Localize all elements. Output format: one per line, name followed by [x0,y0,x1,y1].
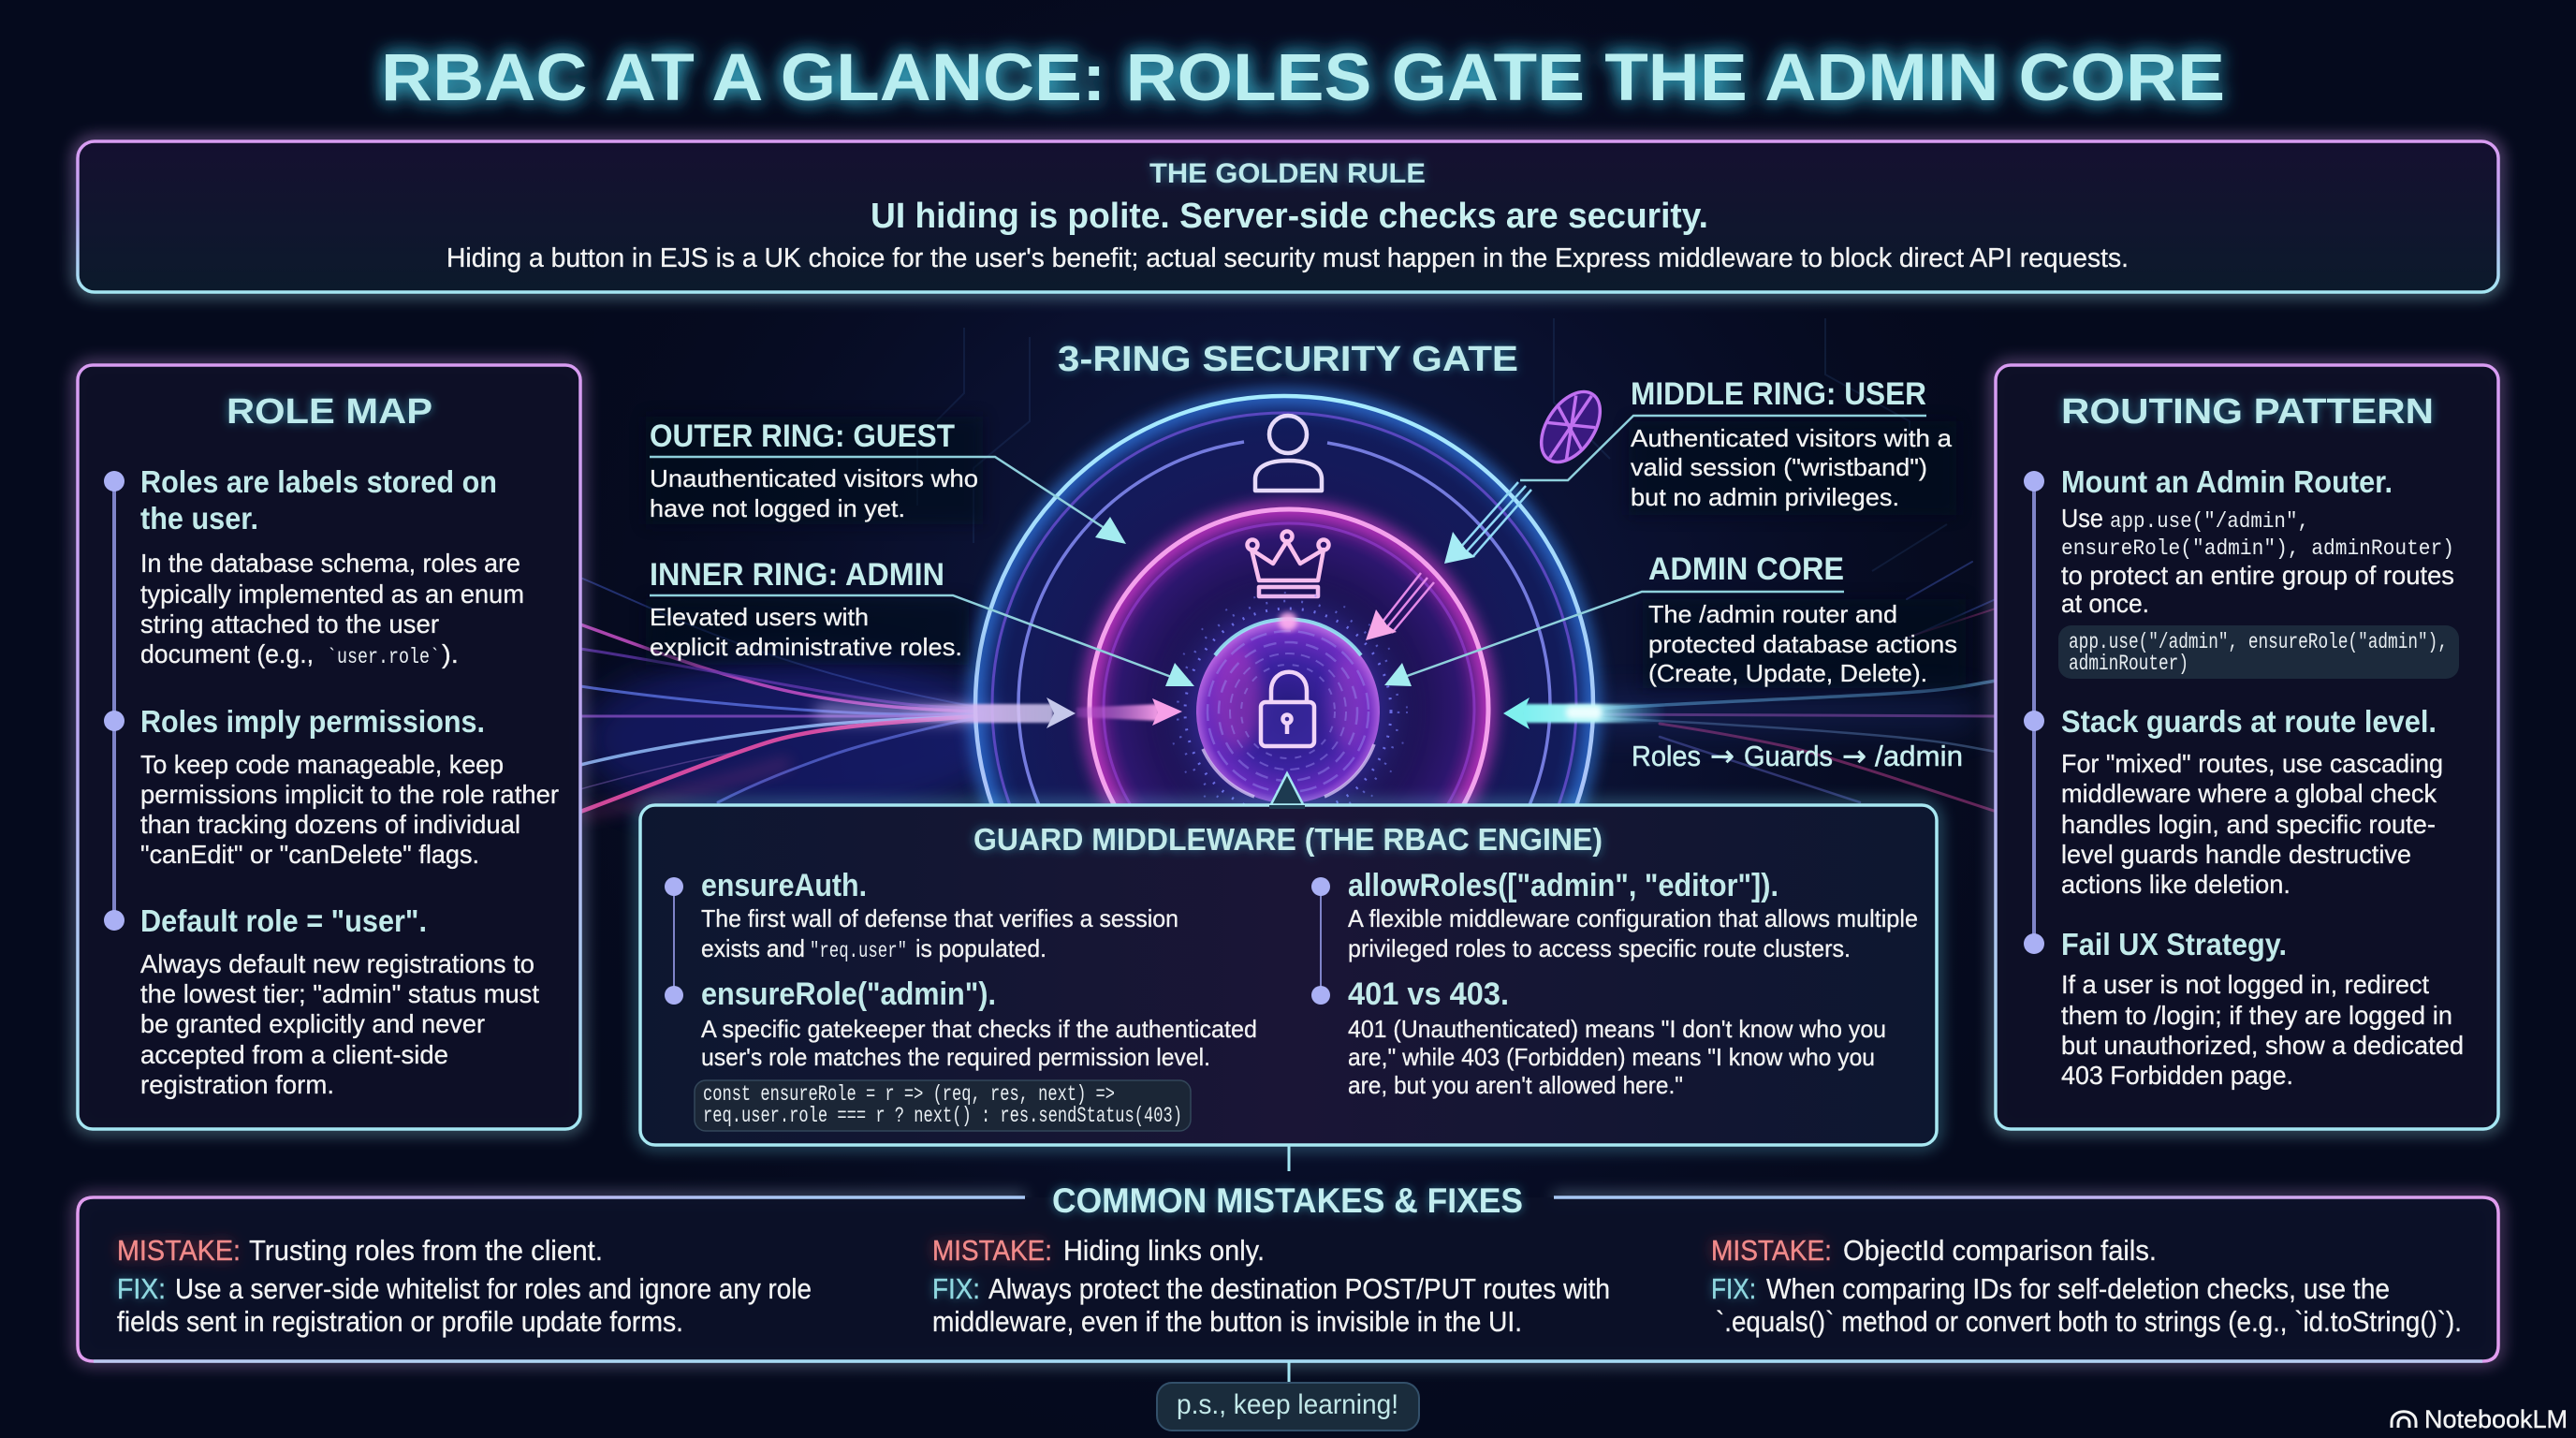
item: stack guards: For "mixed" routes, use cascading [2061,749,2443,778]
callout: outer ring guest: Unauthenticated visitors who [650,464,978,492]
routing timeline [2024,471,2044,954]
icon: person [1255,416,1322,491]
gate heading: 3-RING SECURITY GATE [1058,340,1518,379]
footer pill: p.s., keep learning! [1177,1389,1398,1420]
footer pill [1157,1383,1419,1431]
panel: common mistakes [78,1181,2498,1361]
panel: role map [78,365,580,1129]
panel: guard middleware [640,773,1937,1145]
item: ensureAuth: is populated. [915,934,1046,962]
mistake 1: fields sent in registration or profile update forms. [117,1305,683,1338]
item: fail ux strategy: Fail UX Strategy. [2061,927,2287,961]
item: stack guards: level guards handle destructive [2061,840,2411,869]
mistake 2: Always protect the destination POST/PUT routes with [988,1272,1610,1305]
3-ring gate diagram [899,396,1666,1014]
callout: outer ring guest [646,417,1126,544]
item: 401 vs 403: 401 vs 403. [1348,976,1509,1012]
routing heading: ROUTING PATTERN [2061,392,2434,432]
item: ensureAuth: exists and [701,934,805,962]
item: default role: Always default new registrations to [140,949,534,978]
item: ensureAuth: "req.user" [810,939,907,963]
item: default role: be granted explicitly and never [140,1009,485,1038]
panel: routing pattern [1996,365,2498,1129]
callout: admin core: (Create, Update, Delete). [1648,659,1927,687]
item: mount an admin router [2058,464,2459,679]
mistake 3: FIX: [1711,1272,1756,1305]
arrow: pink diagonal [1366,573,1434,640]
callout: middle ring user: Authenticated visitors with a [1631,424,1953,452]
item: fail ux strategy: them to /login; if they are logged in [2061,1001,2452,1030]
title: RBAC AT A GLANCE: ROLES GATE THE ADMIN CORE [381,41,2225,115]
callout: admin core [1384,551,1966,688]
item: default role: accepted from a client-side [140,1040,448,1069]
code box: ensureRole: const ensureRole = r => (req, res, next) => [703,1082,1115,1107]
callout: admin core: protected database actions [1648,630,1957,658]
callout: outer ring guest: OUTER RING: GUEST [650,418,955,454]
item: roles are labels: In the database schema, roles are [140,549,520,578]
callout: outer ring guest: have not logged in yet. [650,494,905,522]
golden rule explanation: Hiding a button in EJS is a UK choice for the user's benefit; actual security must happen in the Express middleware to block direct API requests. [446,243,2129,273]
item: allowRoles [1348,868,1918,962]
item: roles imply permissions: permissions implicit to the role rather [140,780,559,809]
item: ensureAuth: ensureAuth. [701,868,867,903]
mistake 1: Use a server-side whitelist for roles and ignore any role [175,1272,812,1305]
item: ensureRole: ensureRole("admin"). [701,976,996,1012]
item: ensureAuth: The first wall of defense that verifies a session [701,904,1178,932]
connector: guard to mistakes [1288,1145,1290,1171]
code box: admin router: app.use("/admin", ensureRole("admin"), [2069,630,2448,654]
flow caption: Guards [1744,740,1833,772]
mistakes heading: COMMON MISTAKES & FIXES [1052,1181,1523,1220]
guard timelines [665,877,1330,1005]
item: fail ux strategy: 403 Forbidden page. [2061,1061,2293,1090]
item: allowRoles: A flexible middleware configuration that allows multiple [1348,904,1918,932]
item: 401 vs 403 [1348,976,1886,1099]
callout: middle ring user [1520,376,1956,515]
item: roles are labels: the user. [140,501,258,536]
mistake 2: Hiding links only. [1063,1234,1265,1267]
flow caption: Roles [1632,740,1701,772]
energy rays: left fan [580,578,1011,824]
mistake 2: middleware, even if the button is invisible in the UI. [932,1305,1522,1338]
callout: inner ring admin [646,557,1194,686]
core sphere [1169,593,1407,830]
item: mount an admin router: app.use("/admin", [2110,509,2309,534]
item: fail ux strategy [2061,927,2464,1090]
mistake 3: When comparing IDs for self-deletion checks, use the [1766,1272,2390,1305]
mistake 1: MISTAKE: [117,1234,241,1267]
role map heading: ROLE MAP [227,392,432,432]
mistake 1 [117,1234,812,1338]
item: default role: the lowest tier; "admin" status must [140,979,539,1008]
item: roles imply permissions: "canEdit" or "canDelete" flags. [140,840,479,869]
mistake 3 [1711,1234,2462,1338]
item: allowRoles: privileged roles to access specific route clusters. [1348,934,1851,962]
item: roles imply permissions: To keep code manageable, keep [140,750,504,779]
callout: inner ring admin: Elevated users with [650,603,869,631]
mistake 2 [932,1234,1610,1338]
role map timeline [104,471,124,931]
item: roles are labels: typically implemented as an enum [140,580,524,609]
item: mount an admin router: Mount an Admin Router. [2061,464,2393,499]
arrow: user to middle ring [1444,482,1531,564]
code box: admin router: adminRouter) [2069,652,2188,676]
item: ensureAuth [701,868,1178,963]
guard heading: GUARD MIDDLEWARE (THE RBAC ENGINE) [973,822,1603,857]
flow caption: → [1710,740,1734,773]
icon: crown [1247,532,1329,596]
arrow: left pale [899,697,1076,728]
mistake 2: MISTAKE: [932,1234,1052,1267]
item: default role: Default role = "user". [140,903,427,938]
item: roles are labels [140,464,524,669]
item: stack guards: Stack guards at route level. [2061,704,2437,739]
item: fail ux strategy: but unauthorized, show a dedicated [2061,1031,2464,1060]
connector: mistakes to footer [1288,1361,1290,1383]
callout: middle ring user: MIDDLE RING: USER [1631,376,1926,412]
item: ensureRole: user's role matches the required permission level. [701,1043,1210,1071]
mistake 2: FIX: [932,1272,980,1305]
code box: ensureRole: req.user.role === r ? next() : res.sendStatus(403) [703,1104,1182,1128]
callout: inner ring admin: INNER RING: ADMIN [650,557,944,593]
arrow: left pink [1076,698,1182,726]
mistake 3: `.equals()` method or convert both to strings (e.g., `id.toString()`). [1716,1305,2462,1338]
item: mount an admin router: ensureRole("admin"), adminRouter) [2061,536,2454,561]
item: roles are labels: `user.role` [327,645,440,669]
icon: padlock [1261,672,1314,746]
outer ring: guest [975,396,1593,1014]
arrow: right cyan [1503,697,1666,729]
item: stack guards: actions like deletion. [2061,870,2291,899]
item: 401 vs 403: 401 (Unauthenticated) means "I don't know who you [1348,1015,1886,1043]
item: default role: registration form. [140,1070,334,1099]
flow caption [1632,740,1963,773]
flow caption: /admin [1875,740,1963,772]
item: ensureRole: A specific gatekeeper that checks if the authenticated [701,1015,1257,1043]
panel: golden rule [78,141,2498,292]
item: stack guards: middleware where a global check [2061,779,2437,808]
item: allowRoles: allowRoles(["admin", "editor"]). [1348,868,1778,903]
middle ring [1090,509,1488,908]
item: roles are labels: document (e.g., [140,639,314,668]
callout: middle ring user: valid session ("wristband") [1631,453,1927,481]
item: fail ux strategy: If a user is not logged in, redirect [2061,970,2429,999]
mistake 1: Trusting roles from the client. [249,1234,603,1267]
item: 401 vs 403: are," while 403 (Forbidden) means "I know who you [1348,1043,1875,1071]
energy rays: right fan [1591,562,1997,812]
item: roles are labels: string attached to the user [140,609,439,638]
mistake 3: ObjectId comparison fails. [1843,1234,2157,1267]
item: 401 vs 403: are, but you aren't allowed here." [1348,1071,1683,1099]
golden rule label: THE GOLDEN RULE [1149,158,1426,189]
code box: admin router [2058,625,2459,679]
item: mount an admin router: at once. [2061,589,2149,618]
item: roles are labels: ). [442,639,459,668]
item: roles imply permissions: Roles imply permissions. [140,704,485,739]
code box: ensureRole [695,1080,1191,1131]
callout: admin core: The /admin router and [1648,600,1897,628]
notebooklm mark: NotebookLM [2424,1405,2568,1433]
item: mount an admin router: Use [2061,504,2103,533]
item: roles imply permissions: than tracking dozens of individual [140,810,520,839]
item: mount an admin router: to protect an entire group of routes [2061,561,2454,590]
callout: admin core: ADMIN CORE [1648,551,1844,587]
flow caption: → [1842,740,1866,773]
callout: middle ring user: but no admin privileges. [1631,483,1899,511]
mistake 1: FIX: [117,1272,166,1305]
golden rule headline: UI hiding is polite. Server-side checks are security. [871,197,1708,236]
item: stack guards: handles login, and specific route- [2061,810,2436,839]
item: ensureRole [695,976,1257,1131]
item: stack guards [2061,704,2443,899]
item: roles are labels: Roles are labels stored on [140,464,497,499]
icon: wristband [1530,381,1612,473]
item: roles imply permissions [140,704,559,869]
item: default role [140,903,539,1099]
mistake 3: MISTAKE: [1711,1234,1832,1267]
callout: inner ring admin: explicit administrative roles. [650,633,962,661]
